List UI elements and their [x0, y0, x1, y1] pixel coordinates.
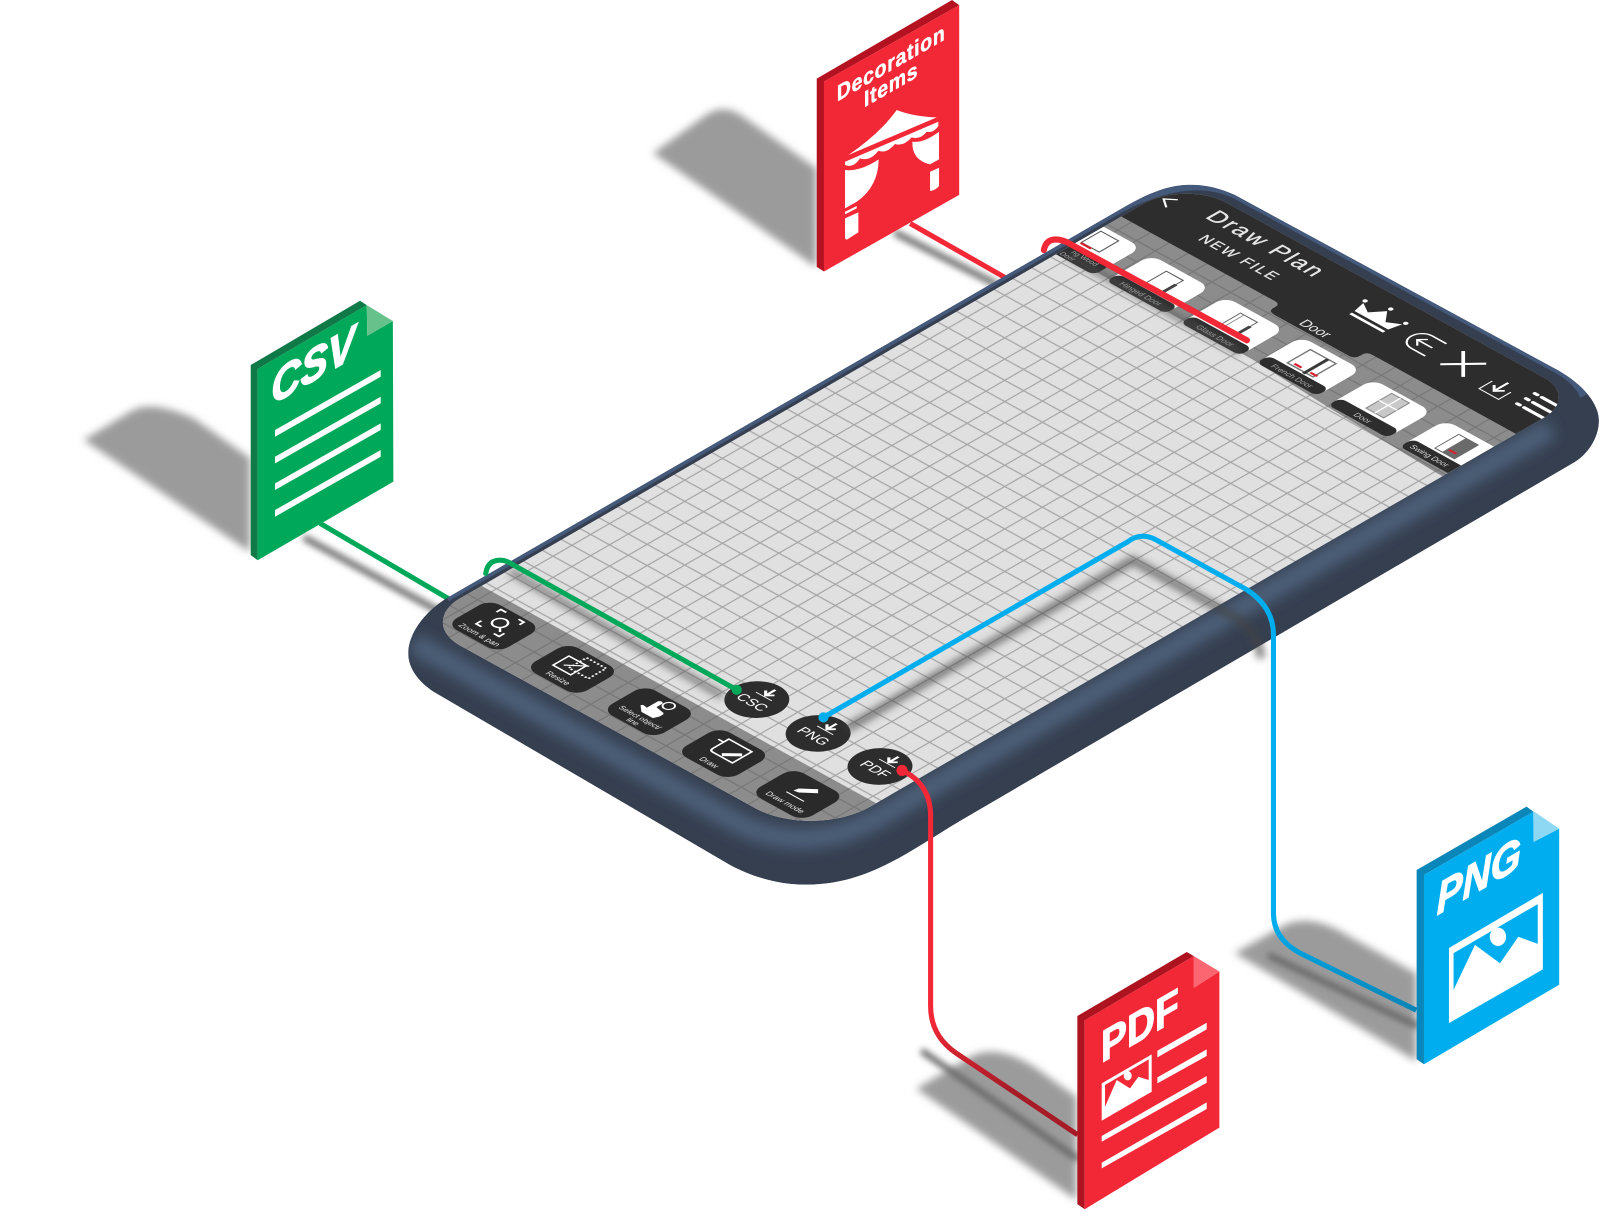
export button: PNG: PNG: [792, 725, 833, 748]
tool: draw: [682, 730, 766, 777]
document fold: [367, 305, 393, 336]
document spine: [1417, 807, 1533, 1064]
tool: draw mode: [756, 771, 840, 818]
export button: PDF: PDF: [855, 759, 894, 781]
tool: draw: Draw: [697, 756, 721, 769]
document spine: [817, 0, 959, 271]
connector: red wire along door cards: [1044, 239, 1247, 340]
tool: zoom and pan: Zoom & pan: [456, 622, 502, 648]
connector: red wire from PDF button to PDF document: [896, 765, 1078, 1135]
shadow: decoration items document: [653, 109, 816, 267]
icon: back arrow: [1162, 198, 1178, 208]
card: swing door: [1402, 423, 1494, 473]
tool: resize: [531, 646, 614, 693]
card: door: [1331, 382, 1427, 436]
document fold: [1534, 811, 1559, 842]
bottom grey band: [442, 586, 876, 821]
connector: CSV document to phone: [320, 523, 449, 599]
document face: [1424, 812, 1559, 1064]
connector: blue wire from PNG button to PNG document: [818, 536, 1416, 1010]
grid canvas: [442, 194, 1559, 821]
export button: PDF: [848, 748, 912, 785]
shadow: PNG document: [1235, 921, 1416, 1061]
document face: [258, 305, 393, 560]
shadow: PDF document: [916, 1052, 1077, 1200]
wire shadows on the phone: [510, 255, 1261, 729]
bottom tool buttons: [445, 599, 846, 821]
header bar: [1122, 194, 1559, 434]
document: PNG: [1417, 807, 1559, 1064]
tool: select object or line: [608, 688, 691, 736]
document: CSV: [251, 301, 393, 560]
tool: select object or line: line: [624, 717, 642, 727]
icon: download: [1478, 380, 1512, 400]
label: Decoration Items: Items: [864, 56, 918, 113]
icon: menu: [1517, 393, 1561, 418]
document face: [824, 5, 959, 271]
card: glass door: [1184, 300, 1279, 354]
card: glass door: Glass Door: [1193, 324, 1237, 348]
document spine: [1077, 952, 1194, 1209]
document: decoration items: [817, 0, 959, 271]
document spine: [251, 301, 367, 560]
label: PNG: PNG: [1437, 826, 1521, 925]
card: french door: French Door: [1268, 363, 1316, 389]
picture and text lines icon: [1102, 1023, 1207, 1168]
picture icon: [1449, 893, 1543, 1023]
tool: resize: Resize: [543, 670, 573, 687]
card: swing wood door: [1056, 226, 1136, 274]
label: Decoration Items: Decoration: [837, 19, 945, 107]
door cards: [1056, 226, 1494, 473]
card: swing wood door: ng Wood: [1069, 250, 1100, 267]
phone: [385, 157, 1600, 885]
card: hinged door: Hinged Door: [1117, 281, 1165, 307]
label: CSV: CSV: [271, 313, 358, 415]
card: hinged door: [1109, 258, 1205, 312]
title: Draw Plan: Draw Plan: [1200, 207, 1331, 280]
icon: import door: [1406, 333, 1448, 356]
connector: green wire to CSC button: [486, 560, 742, 695]
card: door: Door: [1351, 412, 1374, 425]
phone body: [408, 185, 1599, 885]
tab label: Door: Door: [1294, 318, 1335, 341]
icon: curtain canopy: [845, 110, 939, 240]
document fold: [1194, 956, 1219, 988]
export button: CSC: [724, 681, 790, 718]
label: PDF: PDF: [1101, 977, 1179, 1073]
card: swing wood door: Door: [1057, 251, 1078, 263]
icon: close: [1440, 351, 1486, 377]
wire shadows outside the phone: [306, 234, 1416, 1158]
top grey band: [1078, 211, 1526, 476]
phone screen: [442, 194, 1559, 821]
shadow: CSV document: [84, 407, 250, 552]
document: PDF: [1077, 952, 1219, 1209]
card: french door: [1260, 340, 1356, 394]
document face: [1085, 956, 1219, 1209]
text lines icon: [275, 370, 381, 517]
connector: decoration items document to phone: [910, 223, 1005, 278]
export button: PNG: [786, 715, 851, 752]
tool: select object or line: Select object/: [616, 704, 665, 731]
tool: zoom and pan: [452, 602, 536, 650]
card: swing door: Swing Door: [1407, 444, 1452, 468]
export button: CSC: CSC: [731, 692, 771, 714]
subtitle: New File: NEW FILE: [1194, 233, 1283, 282]
icon: crown: [1349, 299, 1408, 333]
tool: draw mode: Draw mode: [763, 790, 807, 815]
